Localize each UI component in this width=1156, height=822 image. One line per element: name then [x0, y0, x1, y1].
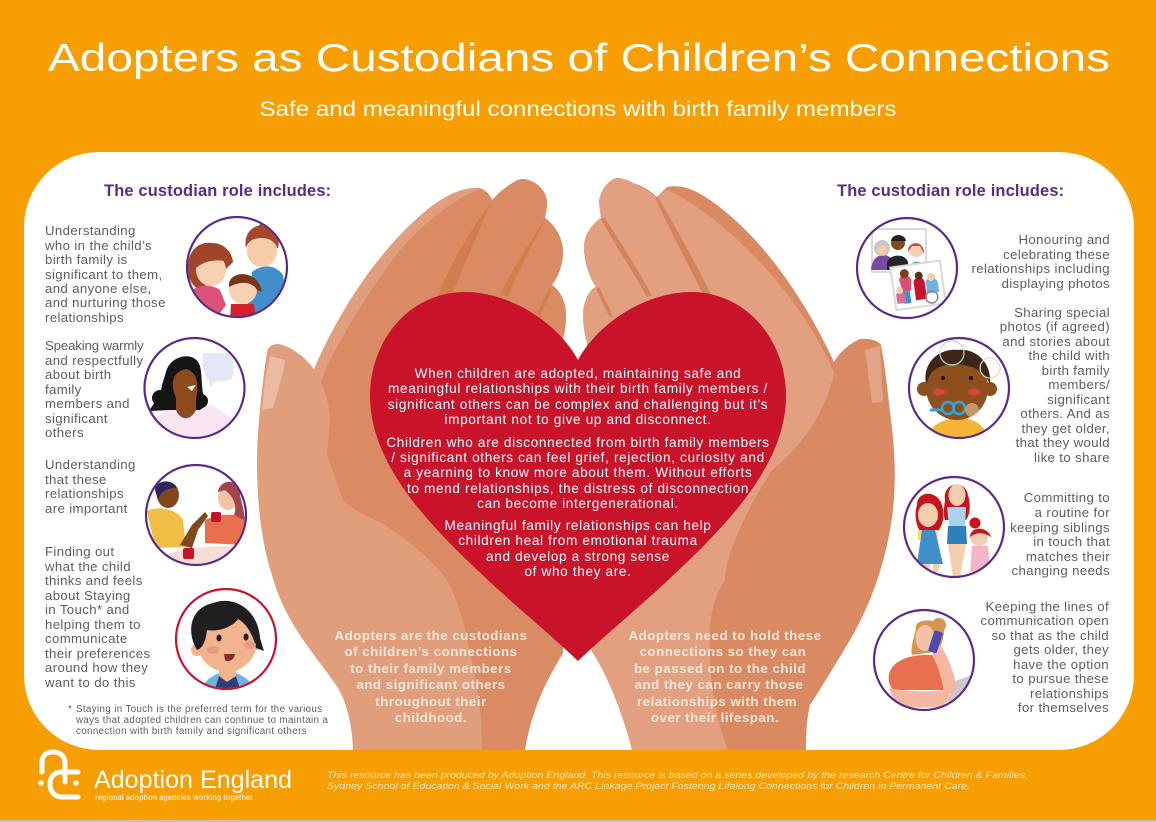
- left palm text: throughout their: [375, 694, 487, 709]
- text: speaking warmly: and respectfully: [45, 353, 143, 368]
- text: keeping lines open: Keeping the lines of: [986, 599, 1109, 614]
- text: finding out: thinks and feels: [45, 573, 143, 588]
- text: honouring: Honouring and: [1019, 232, 1110, 247]
- text: sharing photos: others. And as: [1020, 406, 1110, 421]
- left hand illustration: [257, 179, 566, 750]
- text: speaking warmly: Speaking warmly: [45, 338, 144, 353]
- text: relationships important: that these: [45, 472, 107, 487]
- icon: woman on phone: [874, 610, 974, 710]
- heart text: Children who are disconnected from birth family members: [386, 435, 770, 450]
- text: keeping lines open: gets older, they: [1013, 642, 1109, 657]
- text: speaking warmly: family: [45, 382, 82, 397]
- text: understanding who: birth family is: [45, 252, 128, 267]
- footnote: *: [68, 704, 72, 715]
- text: speaking warmly: about birth: [45, 367, 112, 382]
- text: sharing photos: Sharing special: [1014, 305, 1110, 320]
- heart text: can become intergenerational.: [477, 496, 679, 511]
- heart text: significant others can be complex and challenging but it’s: [388, 397, 768, 412]
- heart text: of who they are.: [524, 564, 632, 579]
- heart text: children heal from emotional trauma: [458, 533, 698, 548]
- heart text: When children are adopted, maintaining safe and: [415, 366, 741, 381]
- icon: thumb nail right: [865, 346, 883, 403]
- heart text: meaningful relationships with their birth family members /: [388, 381, 768, 396]
- text: keeping lines open: for themselves: [1018, 700, 1109, 715]
- text: sharing photos: that they would: [1016, 435, 1110, 450]
- icon: woman speaking: [144, 338, 244, 440]
- text: finding out: helping them to: [45, 617, 141, 632]
- text: sharing photos: significant: [1047, 392, 1110, 407]
- heart text: a yearning to know more about them. Without efforts: [404, 465, 752, 480]
- text: committing: keeping siblings: [1010, 520, 1110, 535]
- text: committing: in touch that: [1033, 534, 1110, 549]
- text: sharing photos: photos (if agreed): [1000, 319, 1110, 334]
- left palm text: to their family members: [350, 661, 512, 676]
- right hand illustration: [583, 178, 895, 750]
- text: relationships important: relationships: [45, 486, 124, 501]
- icon: family photos: [857, 218, 957, 318]
- footnote: connection with birth family and significant others: [76, 726, 307, 737]
- text: finding out: want to do this: [44, 675, 136, 690]
- left palm text: of children’s connections: [344, 644, 518, 659]
- left palm text: Adopters are the custodians: [334, 628, 528, 643]
- logo: Adoption England: [38, 752, 292, 802]
- heart text: important not to give up and disconnect.: [444, 412, 712, 427]
- text: committing: Committing to: [1024, 490, 1110, 505]
- icon: family of three: [187, 217, 292, 320]
- text: sharing photos: the child with: [1028, 348, 1110, 363]
- text: keeping lines open: to pursue these: [1012, 671, 1109, 686]
- text: finding out: about Staying: [45, 588, 131, 603]
- text: committing: a routine for: [1035, 505, 1110, 520]
- logo wordmark: Adoption England: [94, 766, 292, 794]
- text: understanding who: significant to them,: [45, 267, 163, 282]
- text: understanding who: relationships: [45, 310, 124, 325]
- footnote: ways that adopted children can continue to maintain a: [75, 715, 328, 726]
- text: committing: changing needs: [1012, 563, 1110, 578]
- right palm text: be passed on to the child: [634, 661, 806, 676]
- text: sharing photos: they get older,: [1021, 421, 1110, 436]
- text: speaking warmly: significant: [45, 411, 108, 426]
- bottom edge: [0, 820, 1156, 822]
- text: understanding who: and anyone else,: [45, 281, 152, 296]
- text: speaking warmly: members and: [45, 396, 130, 411]
- left palm text: childhood.: [395, 710, 467, 725]
- footer credit: This resource has been produced by Adoption England. This resource is based on a series developed by the research Centre for Children & Families,: [327, 770, 1028, 781]
- text: keeping lines open: communication open: [980, 613, 1109, 628]
- text: sharing photos: and stories about: [1002, 334, 1110, 349]
- text: understanding who: and nurturing those: [45, 295, 166, 310]
- text: finding out: Finding out: [45, 544, 114, 559]
- icon: thumb nail left: [262, 356, 285, 410]
- text: finding out: in Touch* and: [45, 602, 130, 617]
- icon: three sisters: [904, 477, 1004, 577]
- footnote: Staying in Touch is the preferred term for the various: [76, 704, 322, 715]
- right palm text: over their lifespan.: [651, 710, 779, 725]
- text: keeping lines open: so that as the child: [991, 628, 1109, 643]
- text: finding out: what the child: [44, 559, 131, 574]
- text: sharing photos: members/: [1048, 377, 1110, 392]
- heart text: Meaningful family relationships can help: [444, 518, 712, 533]
- text: speaking warmly: others: [45, 425, 84, 440]
- text: keeping lines open: relationships: [1030, 686, 1109, 701]
- icon: boy with tie: [176, 589, 276, 689]
- text: understanding who: who in the child’s: [44, 238, 152, 253]
- text: finding out: around how they: [45, 660, 148, 675]
- text: understanding who: Understanding: [45, 223, 136, 238]
- heading: left column: The custodian role includes:: [104, 182, 331, 200]
- text: finding out: communicate: [45, 631, 128, 646]
- text: sharing photos: like to share: [1034, 450, 1110, 465]
- text: relationships important: are important: [45, 501, 128, 516]
- text: honouring: relationships including: [972, 261, 1110, 276]
- text: honouring: displaying photos: [1002, 276, 1110, 291]
- text: relationships important: Understanding: [45, 457, 136, 472]
- heart text: / significant others can feel grief, rejection, curiosity and: [391, 450, 765, 465]
- right palm text: and they can carry those: [635, 677, 803, 692]
- heading: right column: The custodian role includes:: [837, 182, 1064, 200]
- title: Adopters as Custodians of Children’s Connections: [48, 37, 1110, 80]
- heart text: to mend relationships, the distress of disconnection: [407, 481, 749, 496]
- heart: [370, 292, 786, 661]
- panel: white content area: [24, 152, 1134, 750]
- left palm text: and significant others: [356, 677, 506, 692]
- logo tagline: regional adoption agencies working together: [95, 793, 253, 802]
- text: finding out: their preferences: [45, 646, 150, 661]
- heart text: and develop a strong sense: [486, 549, 670, 564]
- icon: two women talking: [146, 465, 248, 570]
- logo mark: [38, 752, 79, 797]
- text: honouring: celebrating these: [1003, 247, 1110, 262]
- text: committing: matches their: [1026, 549, 1110, 564]
- subtitle: Safe and meaningful connections with birth family members: [260, 98, 896, 121]
- right palm text: relationships with them: [637, 694, 797, 709]
- text: keeping lines open: have the option: [1013, 657, 1109, 672]
- right palm text: Adopters need to hold these: [628, 628, 822, 643]
- footer credit: Sydney School of Education & Social Work and the ARC Linkage Project Fostering Lifelong Connections for Children in Permanent Care.: [327, 781, 970, 792]
- text: sharing photos: birth family: [1042, 363, 1110, 378]
- right palm text: connections so they can: [640, 644, 806, 659]
- icon: boy blowing bubbles: [909, 338, 1009, 438]
